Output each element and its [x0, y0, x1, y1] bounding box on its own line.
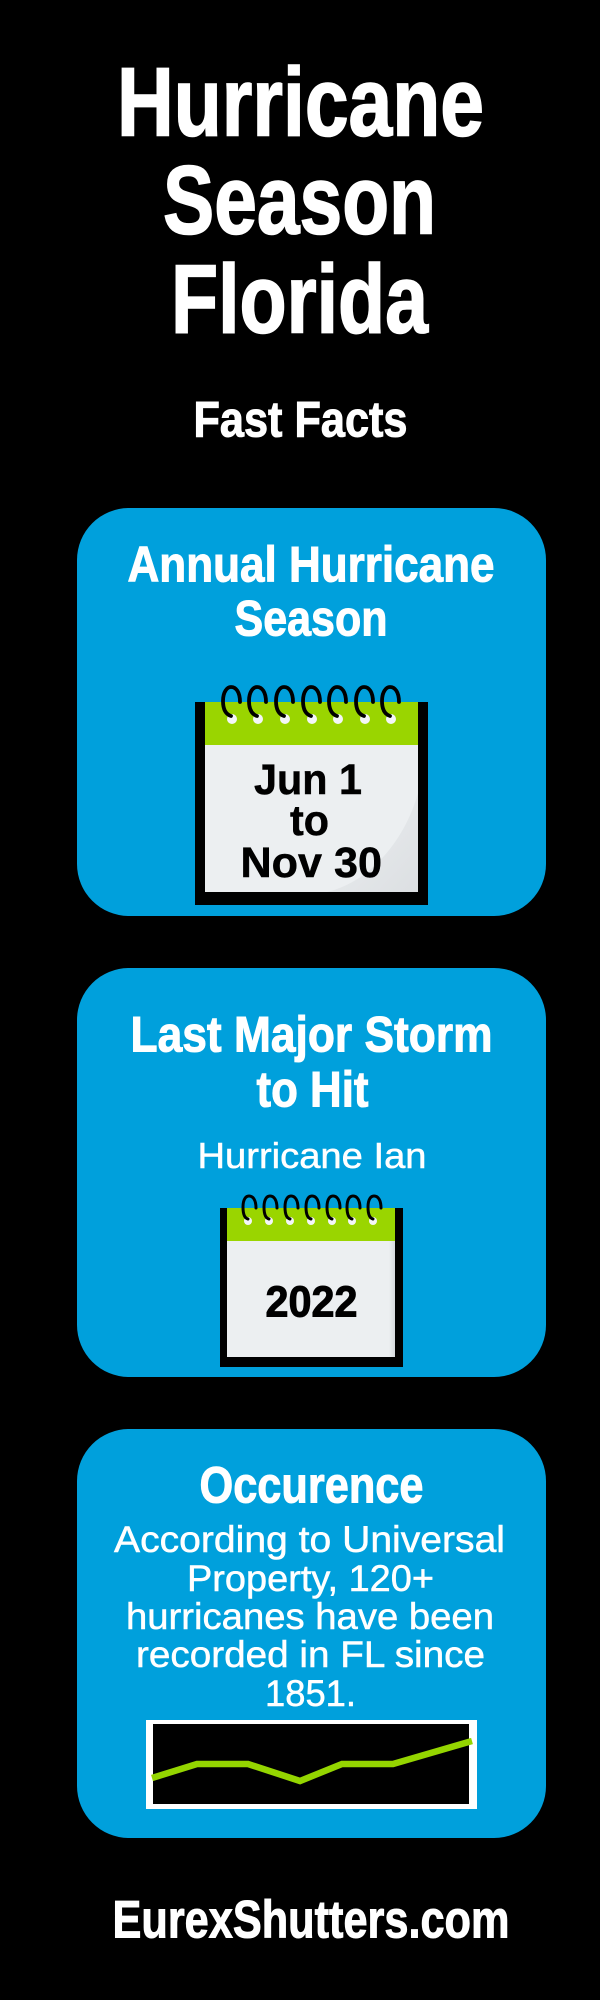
line chart	[146, 1720, 477, 1809]
body text: Property, 120+	[187, 1558, 434, 1599]
body text: recorded in FL since	[136, 1634, 485, 1675]
panel heading: Annual Hurricane	[128, 536, 494, 592]
panel background	[77, 968, 546, 1377]
title: Hurricane	[117, 48, 484, 156]
icon: spiral binding	[243, 1196, 381, 1225]
calendar dates: Jun 1	[254, 756, 362, 804]
icon: spiral binding	[223, 687, 399, 724]
body text	[114, 1519, 505, 1714]
panel: last major storm to hit	[77, 968, 546, 1377]
panel heading	[128, 536, 494, 646]
panel heading: to Hit	[256, 1062, 369, 1118]
calendar dates: Nov 30	[240, 839, 382, 887]
subtitle: fast facts: Fast Facts	[194, 392, 408, 448]
calendar dates: to	[290, 797, 329, 845]
body text: hurricanes have been	[126, 1596, 494, 1637]
calendar year: 2022	[266, 1278, 358, 1326]
panel background	[77, 1429, 546, 1838]
body text: 1851.	[265, 1673, 356, 1714]
panel heading: Last Major Storm	[130, 1006, 492, 1062]
panel heading: Season	[234, 590, 388, 646]
title: Season	[163, 146, 436, 254]
panel heading	[130, 1006, 492, 1118]
icon: calendar 2022	[220, 1196, 403, 1367]
title	[117, 48, 484, 354]
icon: calendar Jun 1 to Nov 30	[195, 687, 428, 905]
calendar dates	[240, 756, 382, 887]
panel: occurence	[77, 1429, 546, 1838]
panel: annual hurricane season	[77, 508, 546, 916]
panel heading: Occurence	[200, 1456, 424, 1514]
footer: website: EurexShutters.com	[112, 1890, 510, 1950]
panel background	[77, 508, 546, 916]
body text: According to Universal	[114, 1519, 505, 1560]
storm name: Hurricane Ian	[198, 1135, 426, 1176]
title: Florida	[171, 244, 429, 354]
